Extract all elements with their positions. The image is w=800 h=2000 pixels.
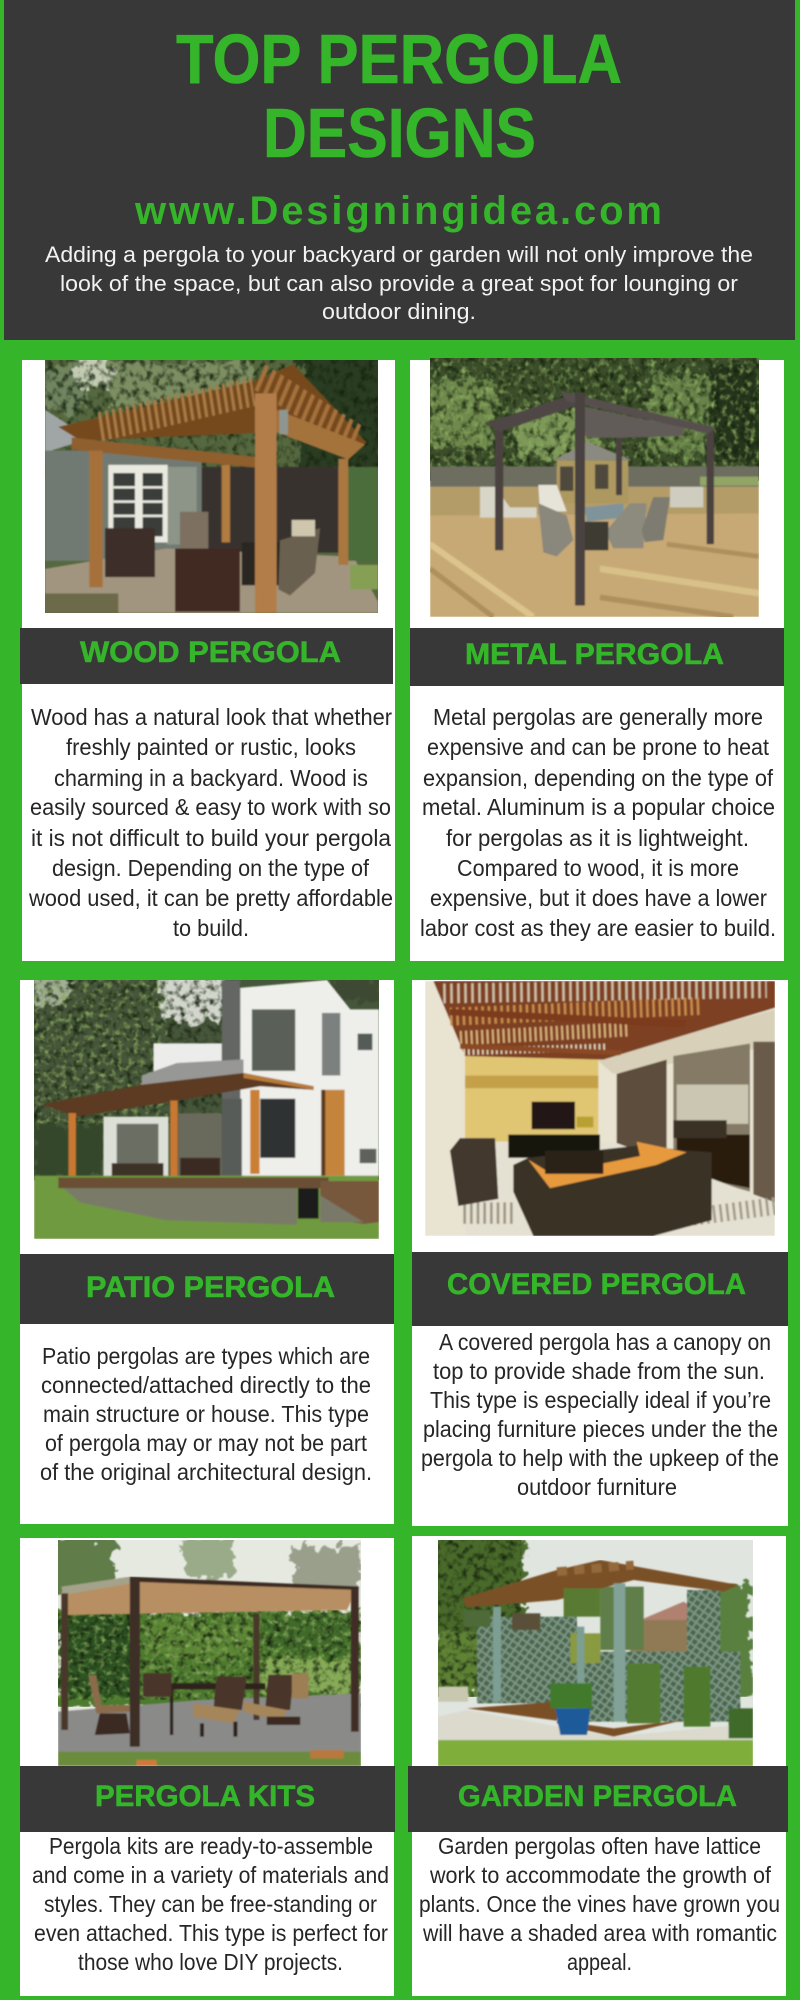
body text: even attached. This type is perfect for [34,1920,388,1946]
body text: This type is especially ideal if you’re [430,1387,771,1413]
panel: garden pergola [408,1533,788,1996]
photo: patio pergola [34,980,379,1239]
body text: Compared to wood, it is more [457,855,739,881]
title bar [410,628,784,686]
panel: pergola kits [20,1537,395,1996]
body text [421,1329,779,1500]
body text: Metal pergolas are generally more [433,704,763,730]
body text: Patio pergolas are types which are [42,1343,370,1369]
body text: expensive, but it does have a lower [430,885,767,911]
body text: to build. [173,915,249,941]
title bar [20,1766,395,1832]
body text: top to provide shade from the sun. [433,1358,765,1384]
title bar [412,1252,788,1326]
title: TOP PERGOLA [176,20,622,98]
title bar: PERGOLA KITS [95,1780,315,1813]
body text: freshly painted or rustic, looks [66,734,356,760]
body text: and come in a variety of materials and [32,1862,389,1888]
body text: expansion, depending on the type of [423,765,774,791]
photo: pergola kits [58,1540,361,1766]
body text: will have a shaded area with romantic [422,1920,777,1946]
intro text: look of the space, but can also provide a great spot for lounging or [60,271,738,296]
title [176,20,622,172]
body text: it is not difficult to build your pergola [31,825,391,851]
body text: pergola to help with the upkeep of the [421,1445,779,1471]
panel: wood pergola [20,353,395,961]
body text [28,704,393,941]
body text: work to accommodate the growth of [429,1862,772,1888]
body text: for pergolas as it is lightweight. [446,825,749,851]
body text: of pergola may or may not be part [45,1430,368,1456]
intro text: outdoor dining. [322,299,476,324]
body text: of the original architectural design. [40,1459,372,1485]
title: DESIGNS [263,94,536,172]
panel: patio pergola [20,974,394,1524]
body text [420,704,776,941]
body text: Wood has a natural look that whether [31,704,392,730]
title bar: PATIO PERGOLA [86,1271,335,1304]
title bar [20,1254,394,1324]
body text: those who love DIY projects. [78,1949,343,1975]
body text: main structure or house. This type [43,1401,369,1427]
body text [40,1343,372,1485]
body text: A covered pergola has a canopy on [439,1329,771,1355]
photo: covered pergola [425,981,775,1236]
header panel [4,0,795,340]
title bar: GARDEN PERGOLA [458,1780,737,1813]
body text: easily sourced & easy to work with so [30,794,391,820]
title bar [20,628,393,684]
body text: appeal. [567,1949,632,1975]
body text: styles. They can be free-standing or [44,1891,377,1917]
photo: garden pergola [438,1540,753,1766]
body text: expensive and can be prone to heat [427,734,770,760]
title bar: COVERED PERGOLA [447,1268,746,1301]
body text: connected/attached directly to the [41,1372,371,1398]
body text: wood used, it can be pretty affordable [28,885,393,911]
photo: wood pergola [45,360,378,613]
body text: charming in a backyard. Wood is [54,765,368,791]
intro text: Adding a pergola to your backyard or garden will not only improve the [45,242,753,267]
body text: outdoor furniture [517,1474,677,1500]
website url: www.Designingidea.com [134,189,662,233]
body text: Garden pergolas often have lattice [438,1833,761,1859]
panel: metal pergola [410,358,784,961]
body text: design. Depending on the type of [52,855,370,881]
body text: placing furniture pieces under the the [423,1416,778,1442]
title bar [408,1766,788,1832]
body text [32,1833,389,1975]
intro text [45,242,753,324]
title bar: WOOD PERGOLA [80,636,341,669]
panel: covered pergola [412,980,788,1526]
body text: labor cost as they are easier to build. [420,915,776,941]
body text [419,1833,780,1975]
body text: Pergola kits are ready-to-assemble [49,1833,373,1859]
title bar: METAL PERGOLA [465,638,724,671]
body text: metal. Aluminum is a popular choice [422,794,775,820]
photo: metal pergola [430,358,759,617]
